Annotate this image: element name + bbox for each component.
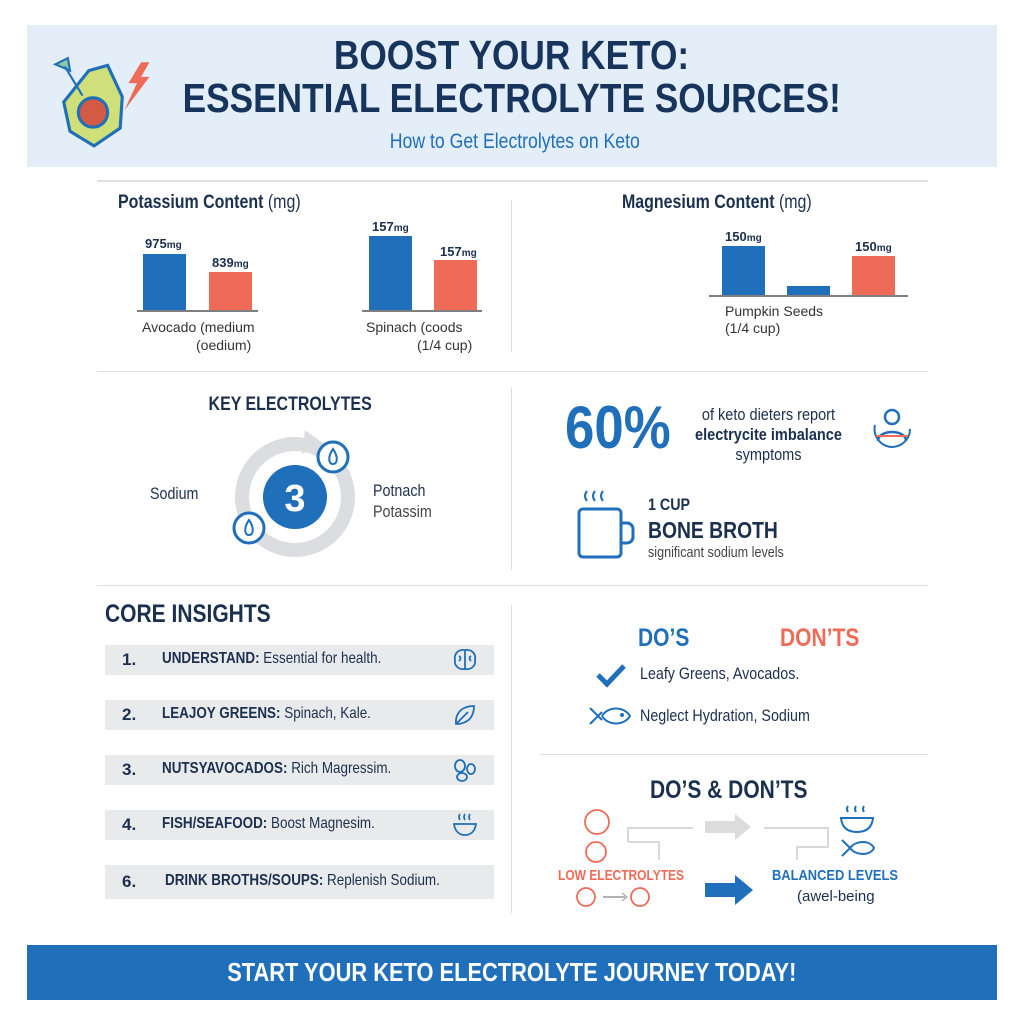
bar chart: 157mg bbox=[372, 219, 409, 234]
bar chart bbox=[709, 229, 908, 336]
header banner bbox=[27, 25, 997, 167]
label: sodium: Sodium bbox=[150, 484, 198, 503]
bar chart: 975mg bbox=[145, 236, 182, 251]
bar chart: Pumpkin Seeds bbox=[725, 303, 823, 319]
insight row 5: 6. bbox=[122, 872, 136, 891]
label: potassium: Potnach bbox=[373, 481, 425, 500]
heading: don'ts: DON’TS bbox=[780, 624, 859, 652]
icon: avocado bbox=[53, 56, 150, 148]
title: BOOST YOUR KETO: bbox=[334, 32, 690, 78]
stat: 60% bbox=[565, 394, 911, 464]
footer banner bbox=[27, 945, 997, 1000]
cycle diagram bbox=[232, 430, 355, 557]
subtitle: How to Get Electrolytes on Keto bbox=[390, 130, 640, 153]
icon: low faces bbox=[577, 810, 649, 906]
icon: person cycle bbox=[874, 408, 911, 448]
stat text: of keto dieters report bbox=[702, 406, 835, 424]
panel: flow diagram: (awel-being bbox=[797, 888, 875, 905]
panel: flow diagram bbox=[558, 776, 898, 907]
panel: flow diagram: BALANCED LEVELS bbox=[772, 867, 898, 884]
panel: do's and don'ts list: Leafy Greens, Avocados. bbox=[640, 664, 799, 683]
bar chart: (oedium) bbox=[196, 337, 251, 353]
icon: check bbox=[596, 664, 626, 688]
insight row 3: 3. bbox=[122, 760, 136, 779]
insight row 5 bbox=[105, 865, 494, 899]
stat: bone broth bbox=[578, 490, 784, 561]
insight row 2 bbox=[105, 700, 494, 730]
panel: flow diagram: LOW ELECTROLYTES bbox=[558, 867, 684, 884]
heading: DO’S & DON’TS bbox=[650, 776, 808, 804]
stat: bone broth: 1 CUP bbox=[648, 495, 690, 514]
insight row 2: 2. bbox=[122, 705, 136, 724]
panel: potassium chart bbox=[118, 192, 482, 353]
cycle diagram: 3 bbox=[284, 478, 306, 520]
insight row 4 bbox=[105, 810, 494, 840]
insight row 1: UNDERSTAND: Essential for health. bbox=[162, 650, 381, 667]
title bbox=[183, 32, 841, 121]
heading: CORE INSIGHTS bbox=[105, 600, 271, 628]
icon: mug bbox=[578, 490, 634, 558]
insight row 5: DRINK BROTHS/SOUPS: Replenish Sodium. bbox=[165, 872, 440, 889]
bar chart: 839mg bbox=[212, 255, 249, 270]
insight row 1: 1. bbox=[122, 650, 136, 669]
stat text: symptoms bbox=[735, 446, 802, 464]
icon: bowl and fish bbox=[841, 806, 874, 856]
panel: do's and don'ts list: Neglect Hydration, Sodium bbox=[640, 706, 810, 725]
bar chart bbox=[137, 219, 482, 353]
insight row 3 bbox=[105, 755, 494, 785]
panel: magnesium chart bbox=[622, 192, 908, 336]
bar chart: 150mg bbox=[725, 229, 762, 244]
stat: 60%: 60% bbox=[565, 394, 671, 461]
bar chart: Avocado (medium bbox=[142, 319, 255, 335]
footer banner: START YOUR KETO ELECTROLYTE JOURNEY TODAY! bbox=[227, 957, 797, 987]
stat: bone broth: significant sodium levels bbox=[648, 544, 784, 561]
icon: fish bbox=[589, 707, 632, 725]
insight row 4: 4. bbox=[122, 815, 136, 834]
insight row 1 bbox=[105, 645, 494, 675]
bar chart: 157mg bbox=[440, 244, 477, 259]
heading: Magnesium Content (mg) bbox=[622, 192, 812, 213]
bar chart: (1/4 cup) bbox=[725, 320, 780, 336]
panel: key electrolytes bbox=[150, 394, 432, 557]
stat: bone broth: BONE BROTH bbox=[648, 517, 778, 543]
heading: Potassium Content (mg) bbox=[118, 192, 301, 213]
insight row 3: NUTSYAVOCADOS: Rich Magressim. bbox=[162, 760, 391, 777]
label: potassium: Potassim bbox=[373, 502, 432, 521]
label: potassium bbox=[373, 481, 432, 521]
bar chart: 150mg bbox=[855, 239, 892, 254]
bar chart: (1/4 cup) bbox=[417, 337, 472, 353]
panel: do's and don'ts list bbox=[589, 624, 859, 725]
heading: do's: DO’S bbox=[638, 624, 689, 652]
stat text: electrycite imbalance bbox=[695, 426, 842, 444]
stat text bbox=[695, 406, 842, 464]
insight row 2: LEAJOY GREENS: Spinach, Kale. bbox=[162, 705, 371, 722]
title: ESSENTIAL ELECTROLYTE SOURCES! bbox=[183, 75, 841, 121]
bar chart: Spinach (coods bbox=[366, 319, 463, 335]
insight row 4: FISH/SEAFOOD: Boost Magnesim. bbox=[162, 815, 375, 832]
heading: KEY ELECTROLYTES bbox=[208, 394, 372, 415]
